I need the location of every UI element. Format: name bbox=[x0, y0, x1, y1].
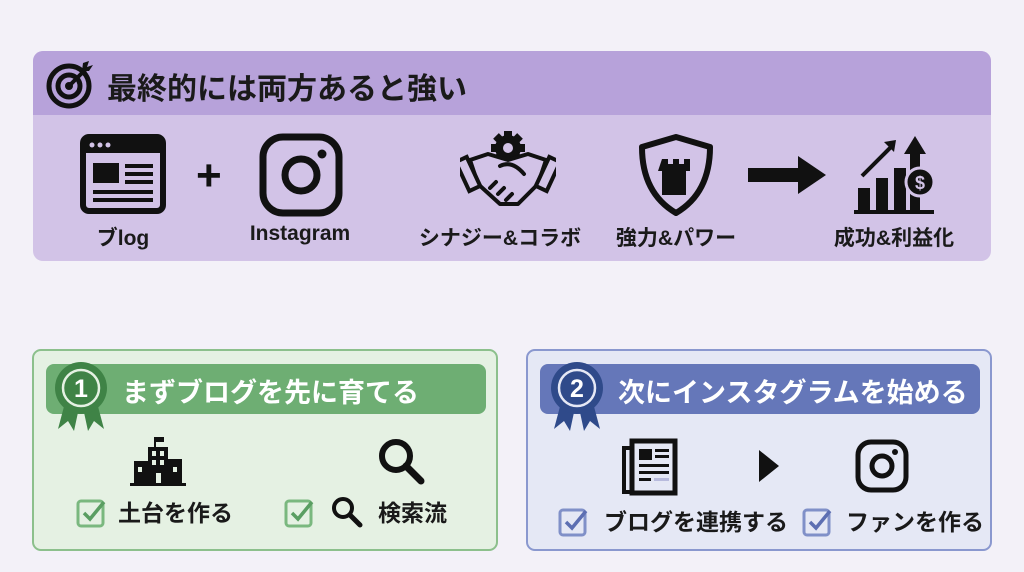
icon: newspaper bbox=[622, 438, 678, 496]
header band bbox=[46, 364, 486, 414]
ribbon badge 1: 1 bbox=[74, 375, 88, 403]
icon: building bbox=[130, 437, 186, 486]
check item: 検索流: 検索流 bbox=[378, 500, 447, 526]
panel: step 1 bbox=[32, 349, 498, 551]
arrow: right bbox=[748, 156, 826, 194]
title: 最終的には両方あると強い bbox=[107, 73, 467, 106]
icon: shield bbox=[639, 134, 713, 216]
label: blog: ブlog bbox=[97, 227, 149, 250]
label: synergy: シナジー&コラボ bbox=[419, 227, 581, 250]
icon: magnifier bbox=[379, 439, 424, 484]
check item: ブログを連携する: ブログを連携する bbox=[604, 509, 788, 535]
icon: blog window bbox=[80, 134, 166, 214]
ribbon badge 1 bbox=[55, 362, 107, 431]
header band bbox=[540, 364, 980, 414]
label: power: 強力&パワー bbox=[616, 227, 736, 250]
icon: growth chart bbox=[854, 136, 934, 214]
check item: 土台を作る: 土台を作る bbox=[118, 500, 233, 526]
panel: top summary bbox=[33, 51, 991, 261]
check item: ファンを作る: ファンを作る bbox=[846, 509, 984, 535]
icon: target bbox=[46, 61, 93, 108]
icon: handshake gear bbox=[460, 131, 556, 206]
arrow: triangle bbox=[759, 450, 779, 482]
icon: growth chart: $ bbox=[915, 173, 925, 193]
icon: plus: + bbox=[196, 151, 222, 200]
icon: instagram small bbox=[856, 440, 908, 492]
header band bbox=[33, 51, 991, 115]
ribbon badge 2: 2 bbox=[570, 375, 584, 403]
icon: instagram bbox=[260, 134, 342, 216]
ribbon badge 2 bbox=[551, 362, 603, 431]
heading: 次にインスタグラムを始める bbox=[618, 378, 968, 408]
check item: 検索流 bbox=[284, 497, 447, 528]
label: instagram: Instagram bbox=[250, 222, 350, 245]
check item: 土台を作る bbox=[76, 500, 233, 528]
label: success: 成功&利益化 bbox=[834, 227, 954, 250]
panel: step 2 bbox=[526, 349, 992, 551]
heading: まずブログを先に育てる bbox=[122, 378, 419, 408]
